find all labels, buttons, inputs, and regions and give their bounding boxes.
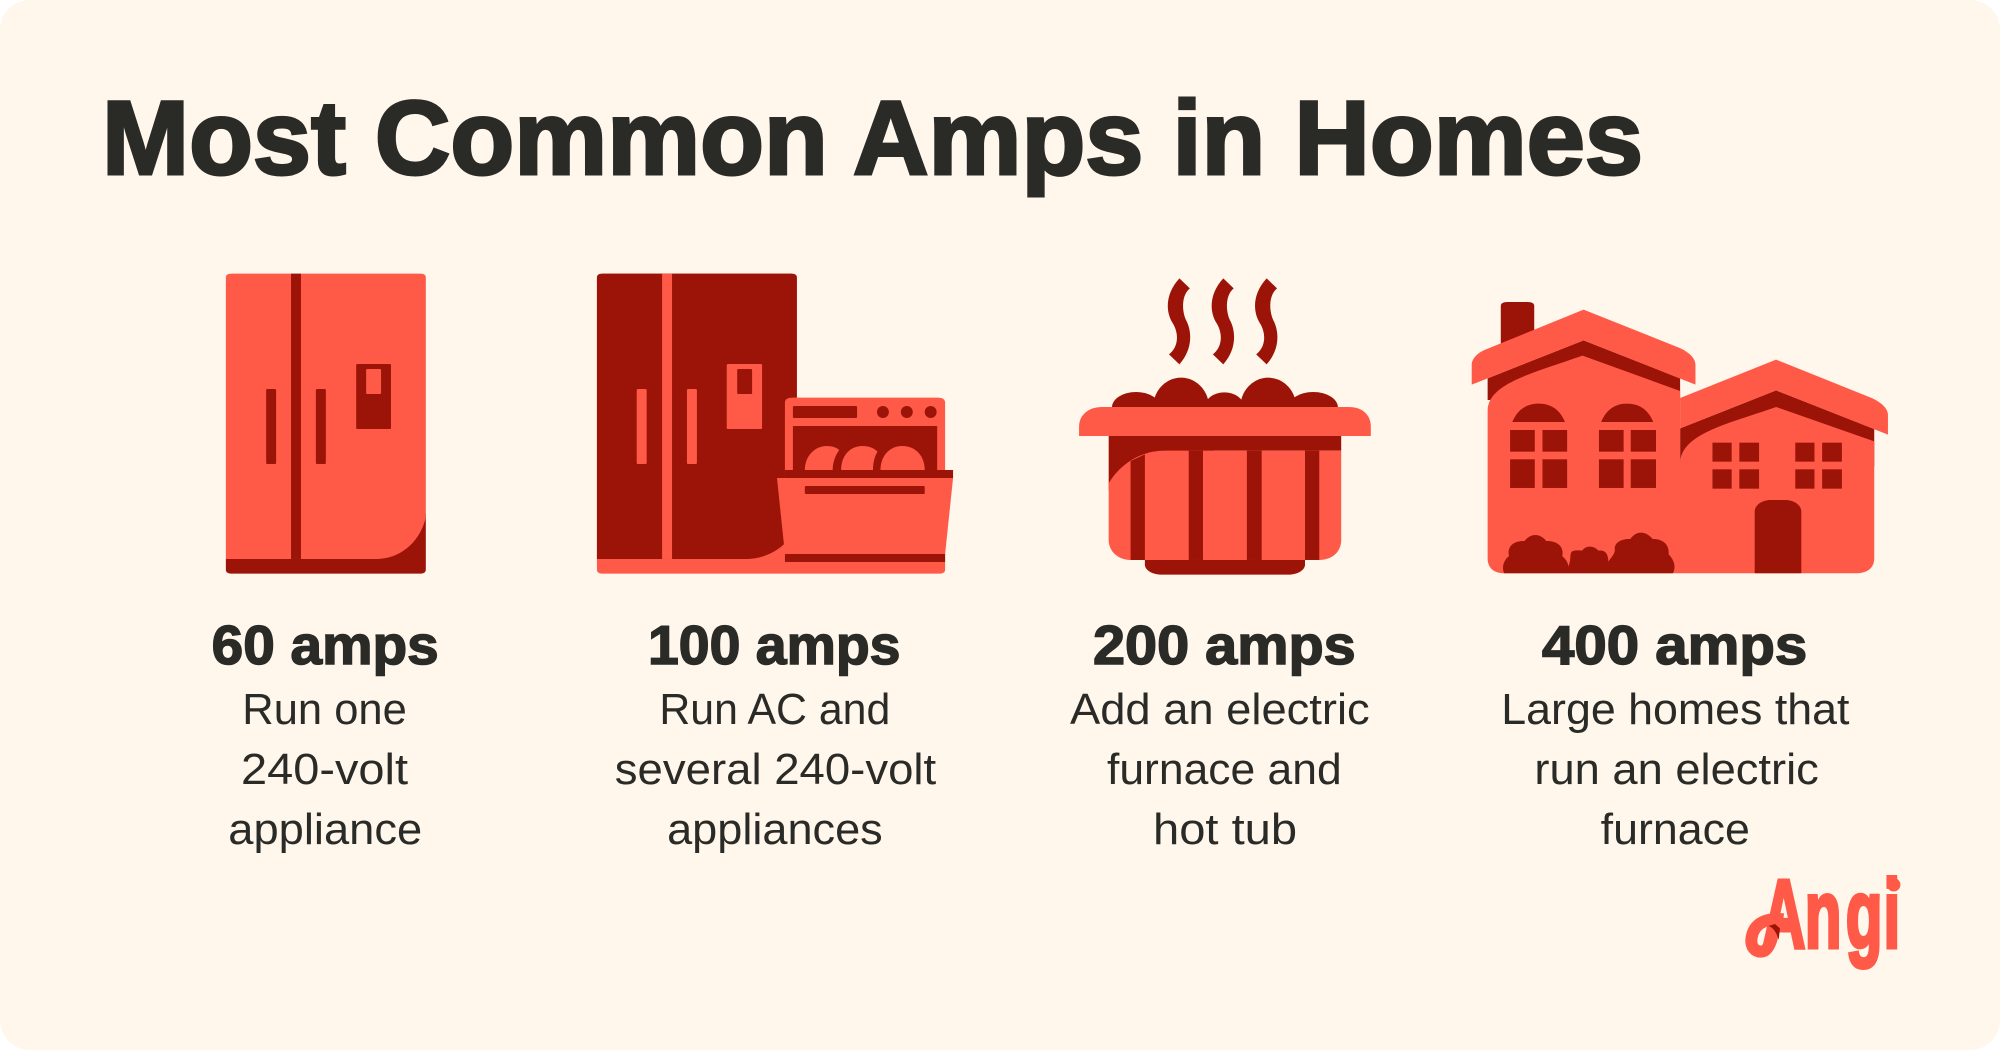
label: 100 amps: appliances xyxy=(667,805,883,854)
label: 60 amps: Run one xyxy=(242,685,407,734)
label: 100 amps: Run AC and xyxy=(659,685,890,734)
label: 60 amps xyxy=(212,614,439,854)
label: 200 amps: Add an electric xyxy=(1070,685,1370,734)
label: 200 amps: 200 amps xyxy=(1093,614,1356,676)
label: 60 amps: 60 amps xyxy=(212,614,439,676)
label: 200 amps xyxy=(1070,614,1370,854)
label: 400 amps: furnace xyxy=(1601,805,1750,854)
icon: steaming hot tub, 200 amps xyxy=(1079,278,1371,575)
icon: refrigerator and dishwasher, 100 amps xyxy=(597,274,953,574)
label: 400 amps: 400 amps xyxy=(1542,614,1807,676)
label: 60 amps: appliance xyxy=(228,805,422,854)
label: 100 amps xyxy=(615,614,936,854)
label: 100 amps: several 240-volt xyxy=(615,745,936,794)
label: 100 amps: 100 amps xyxy=(648,614,900,676)
label: 400 amps xyxy=(1501,614,1850,854)
label: 200 amps: hot tub xyxy=(1153,805,1297,854)
icon: large house, 400 amps xyxy=(1472,302,1888,573)
icon: refrigerator, 60 amps xyxy=(226,274,426,574)
logo: Angi: Angi xyxy=(1762,861,1900,969)
title: Most Common Amps in Homes xyxy=(102,80,1643,197)
label: 400 amps: run an electric xyxy=(1534,745,1819,794)
label: 400 amps: Large homes that xyxy=(1501,685,1850,734)
label: 200 amps: furnace and xyxy=(1107,745,1342,794)
label: 60 amps: 240-volt xyxy=(241,745,408,794)
